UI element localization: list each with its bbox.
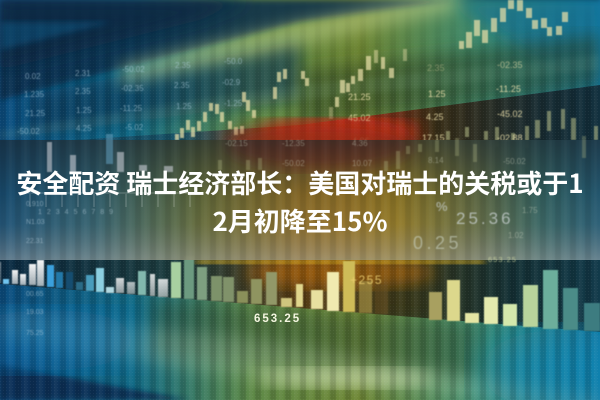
label 653.25 main: 653.25 <box>254 313 301 325</box>
number table upper left: -50.0 <box>224 57 243 66</box>
diagonal upper shadow <box>30 40 300 135</box>
number table upper left: 21.25 <box>25 109 46 118</box>
right mid dark region with red glow <box>0 85 600 270</box>
number table right: -45.02 <box>497 109 523 119</box>
faint labels left: 00.65 <box>26 291 44 298</box>
percent mark: % <box>436 199 448 214</box>
faint labels left: 19.03 <box>26 309 44 316</box>
number table upper left: 4.25 <box>76 124 92 133</box>
faint labels left <box>26 201 118 337</box>
number table upper left: -50.02 <box>122 65 145 74</box>
lighter glow streak <box>120 0 460 85</box>
candlestick series upper <box>175 0 568 140</box>
number table upper left: -11.25 <box>120 104 143 113</box>
number table right: 17.15 <box>422 133 445 143</box>
number table upper left: -02.9 <box>222 78 241 87</box>
title band colour wash <box>0 140 600 260</box>
band red top glow <box>225 121 415 169</box>
number table upper left: -02.35 <box>121 84 144 93</box>
number table right: 4.36 <box>352 136 370 146</box>
number table right: -02.35 <box>497 60 523 70</box>
faint numbers in band: -50.02 <box>503 157 526 166</box>
band vertical shading <box>0 140 600 260</box>
number table right: 21.25 <box>348 92 371 102</box>
faint numbers in band: 10.07 <box>352 159 373 168</box>
title <box>16 164 584 239</box>
number table upper left: 1.25 <box>76 106 92 115</box>
number table upper left: 2.35 <box>174 81 190 90</box>
number table right <box>348 60 523 146</box>
bottom glow <box>255 368 435 388</box>
faint numbers in band: -02.15 <box>225 139 248 148</box>
number table right: 1.25 <box>428 89 446 99</box>
faint labels left: 0.910 <box>26 201 44 208</box>
vertical stripes over band <box>0 140 600 260</box>
number table upper left: 2.35 <box>175 61 191 70</box>
lower dark chart strip <box>0 258 600 332</box>
faint numbers in band: 1.02 <box>508 231 524 240</box>
lower diagonal highlight <box>0 55 600 140</box>
right upper shadow <box>300 35 600 125</box>
faint labels left: 75.25 <box>26 330 44 337</box>
faint numbers in band <box>225 139 538 240</box>
number table right: 2.35 <box>427 63 445 73</box>
band ruler ticks <box>20 193 190 207</box>
faint labels left: 22.31 <box>26 238 44 245</box>
label 653.25 small: 653.25 <box>488 255 517 264</box>
bar chart strip <box>0 256 600 331</box>
title: 2月初降至15% <box>212 202 388 239</box>
red glow <box>260 120 420 144</box>
number table upper left: 1.235 <box>24 90 45 99</box>
faint labels left: N1.03 <box>26 219 45 226</box>
faint numbers in band: 1.75 <box>522 206 538 215</box>
number table upper left: 2.31 <box>75 69 91 78</box>
lower mid shadow <box>150 300 480 380</box>
bottom streak <box>0 312 600 400</box>
bottom left blue glow <box>0 310 140 370</box>
number table upper left: -1.25 <box>224 99 243 108</box>
number table right: 45.02 <box>348 113 371 123</box>
number table upper left: 1.25 <box>176 102 192 111</box>
number table upper left: 2.35 <box>75 87 91 96</box>
number table right: -02.88 <box>497 133 523 143</box>
faint numbers in band: -12.35 <box>282 139 305 148</box>
number table upper left <box>17 57 243 136</box>
faint numbers in band: 8.14 <box>428 156 444 165</box>
yellow glow <box>195 256 485 288</box>
faint numbers in band: -50.02 <box>282 159 305 168</box>
top dark wedge <box>0 0 600 100</box>
number table right: -11.25 <box>496 84 521 94</box>
number table upper left: -50.02 <box>17 127 40 136</box>
number table upper left: -5.02 <box>125 123 144 132</box>
big number 25.36: 25.36 <box>456 209 514 228</box>
big number 0.25: 0.25 <box>413 233 462 253</box>
number table right: 4.25 <box>426 112 444 122</box>
bars seen through band <box>47 134 173 172</box>
bottom left dark corner <box>0 365 190 400</box>
candlestick series lower <box>446 109 598 148</box>
bottom right blue glow <box>480 330 600 400</box>
title: 安全配资 瑞士经济部长：美国对瑞士的关税或于1 <box>16 164 584 201</box>
faint labels left: 123456789 <box>38 209 118 216</box>
label +255: +255 <box>350 273 383 287</box>
faint candles in band <box>218 136 586 171</box>
number table upper left: 0.02 <box>25 72 41 81</box>
faint numbers in band: 4.36 <box>352 139 368 148</box>
